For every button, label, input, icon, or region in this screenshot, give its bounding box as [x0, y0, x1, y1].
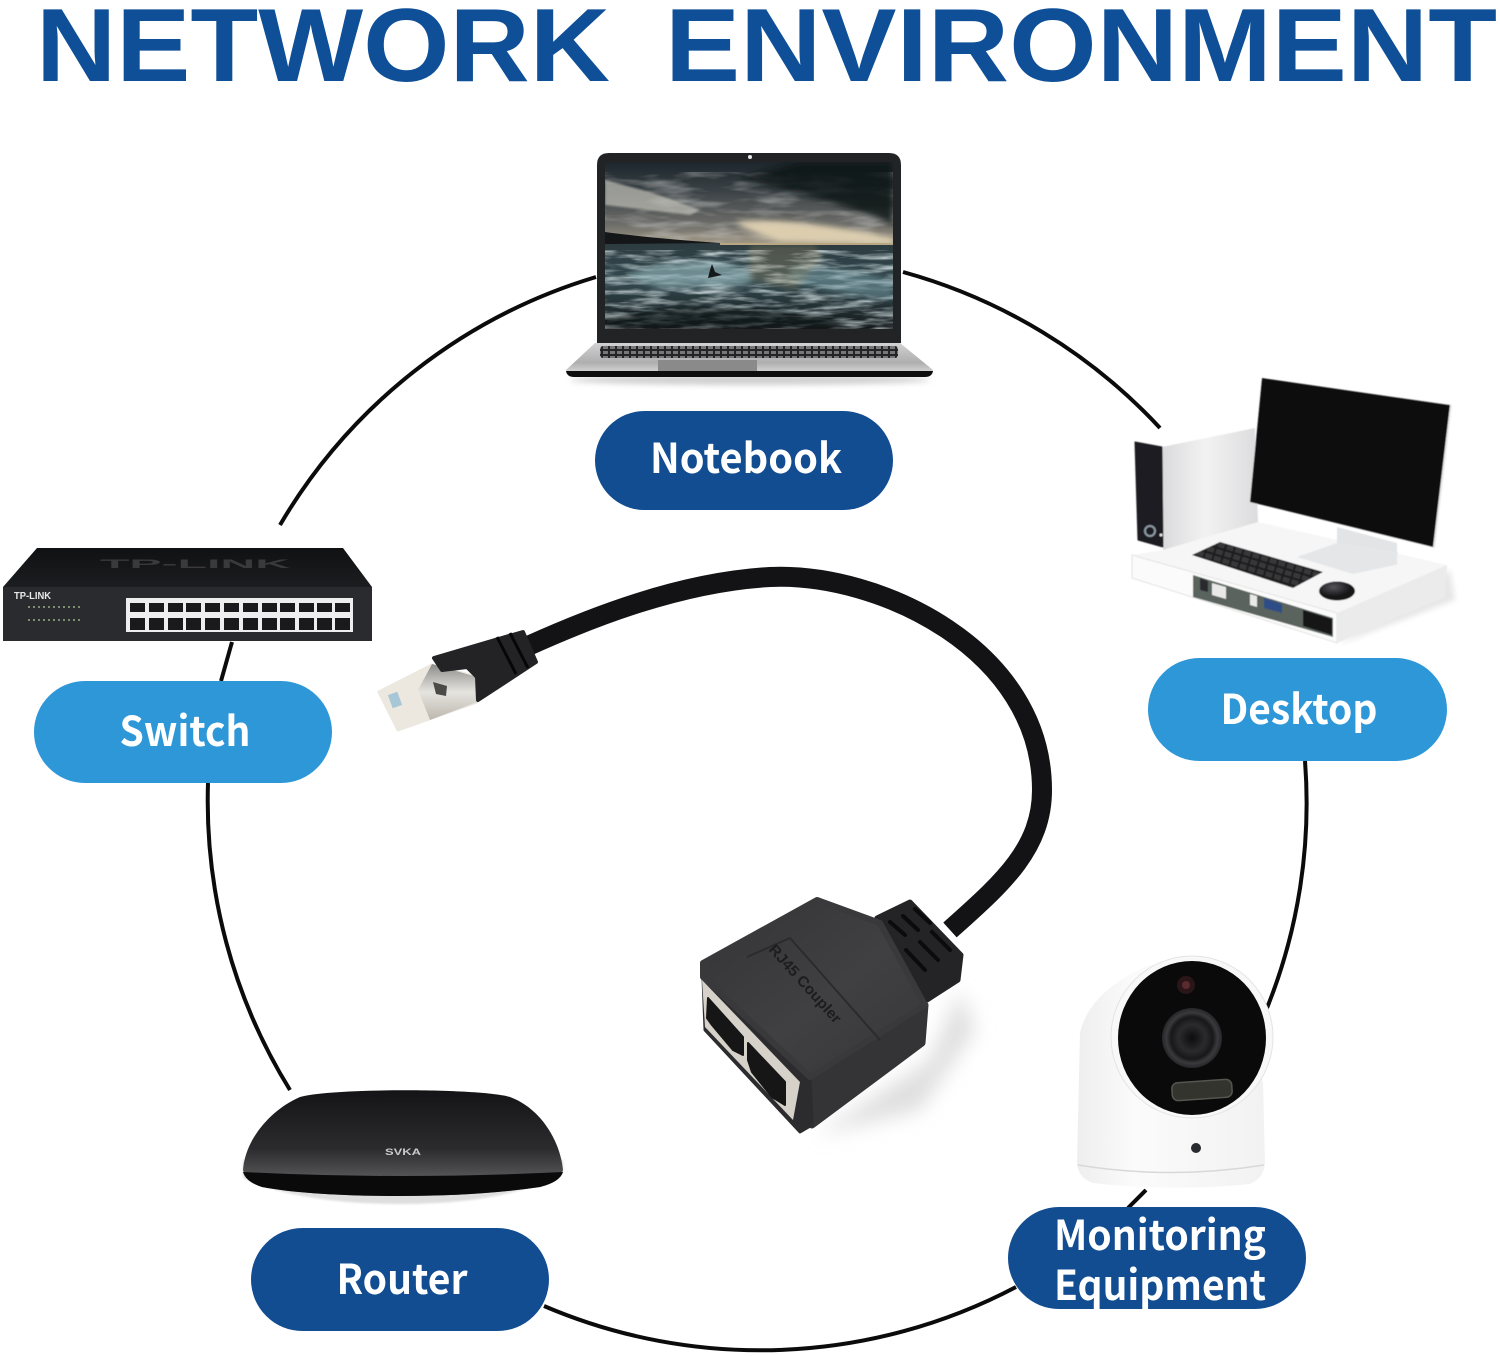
title — [36, 0, 1497, 104]
device: switch: TP-LINK — [14, 591, 52, 602]
ports on platform — [1193, 575, 1333, 637]
pill: Switch — [34, 681, 332, 783]
device: monitoring camera — [1077, 956, 1273, 1188]
device: router — [243, 1090, 563, 1204]
pill: Switch: Switch — [120, 698, 250, 758]
pill: Router — [251, 1228, 549, 1331]
laptop base — [566, 343, 933, 373]
splitter body — [702, 900, 925, 1132]
router logo: SVKA — [385, 1147, 422, 1157]
monitor stand — [1337, 527, 1397, 565]
port panel — [126, 598, 353, 632]
device: desktop — [1132, 378, 1455, 645]
pill: Desktop — [1148, 658, 1447, 761]
status LEDs — [28, 607, 80, 620]
connection ring — [208, 272, 1307, 1350]
keyboard — [1192, 542, 1323, 588]
device: switch: TP-LINK — [100, 557, 291, 571]
camera light bar — [1171, 1079, 1233, 1101]
RJ45 plug — [379, 632, 536, 730]
laptop lid — [597, 153, 901, 343]
computer tower — [1162, 428, 1258, 550]
pill: Monitoring Equipment — [1008, 1202, 1306, 1312]
device: switch — [3, 548, 372, 641]
pill: Desktop: Desktop — [1220, 676, 1378, 736]
cable — [528, 577, 1042, 930]
boot of splitter — [877, 902, 961, 1000]
camera lens — [1162, 1008, 1222, 1068]
splitter port face — [702, 980, 800, 1120]
desk platform — [1132, 522, 1447, 613]
camera body — [1077, 962, 1265, 1188]
cast shadow — [815, 990, 975, 1135]
laptop screen photo — [605, 162, 893, 329]
product: ethernet splitter cable — [379, 577, 1042, 1135]
pill: Monitoring Equipment: Monitoring — [1054, 1202, 1266, 1262]
device: notebook — [566, 153, 933, 385]
pill: Router: Router — [336, 1246, 468, 1306]
pill: Notebook: Notebook — [650, 425, 842, 485]
monitor — [1250, 378, 1452, 548]
mouse — [1319, 582, 1355, 600]
splitter label: RJ45 Coupler — [765, 941, 845, 1027]
pill: Notebook — [595, 411, 893, 510]
pill: Monitoring Equipment: Equipment — [1054, 1252, 1266, 1312]
